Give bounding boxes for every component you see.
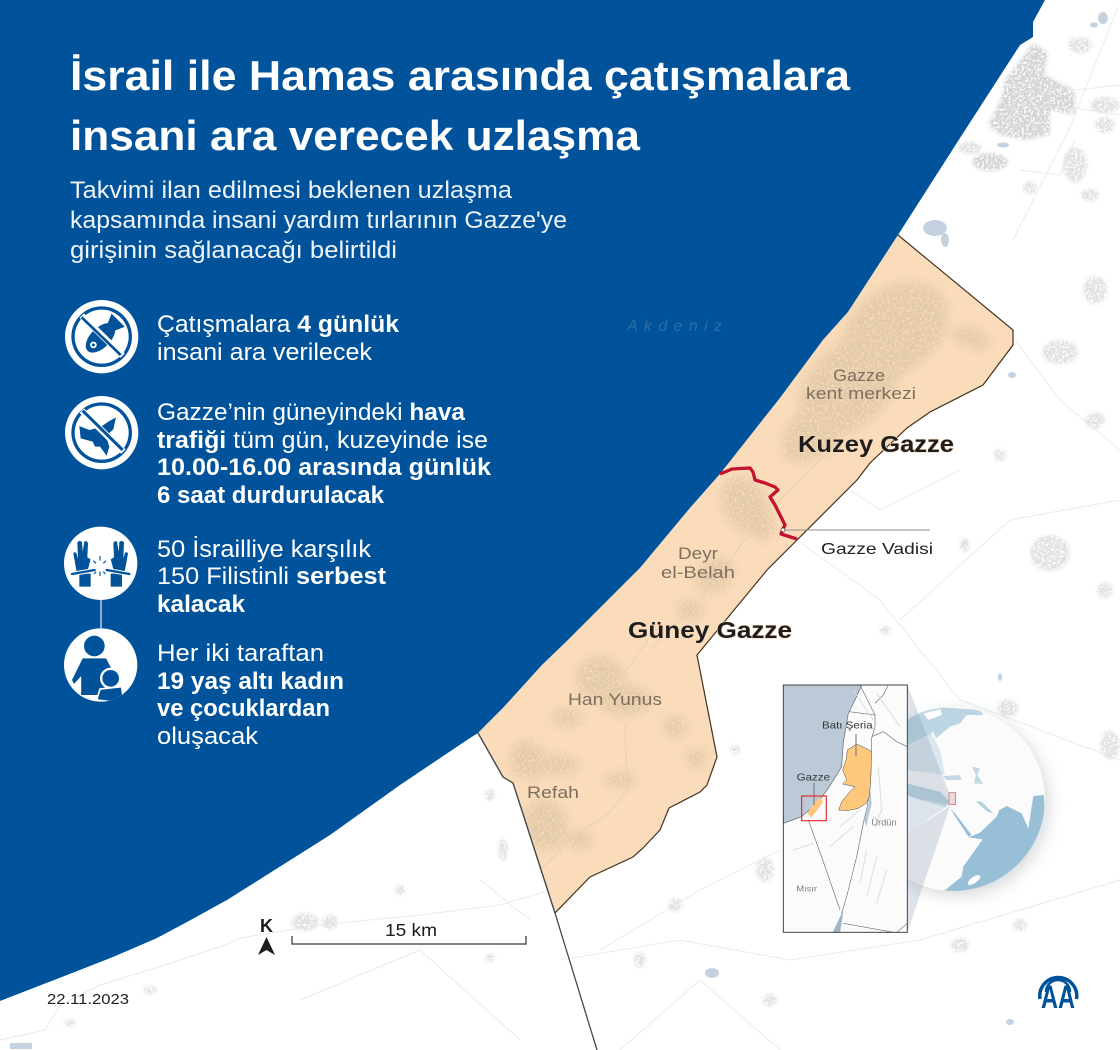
subtitle: kapsamında insani yardım tırlarının Gazze'ye	[70, 207, 567, 234]
subtitle	[70, 177, 567, 264]
locator: globe and inset map: Mısır	[796, 883, 817, 893]
text: women and children: oluşacak	[157, 723, 259, 750]
text: prisoner exchange: kalacak	[157, 591, 246, 618]
subtitle: Takvimi ilan edilmesi beklenen uzlaşma	[70, 177, 513, 204]
text: women and children	[157, 640, 344, 750]
north arrow: K	[260, 916, 273, 936]
inset map	[783, 685, 907, 932]
text: women and children: 19 yaş altı kadın	[157, 668, 344, 695]
label: Deyr el-Belah: Deyr	[678, 545, 719, 563]
text: prisoner exchange: 150 Filistinli serbest	[157, 563, 386, 590]
text: air traffic: 6 saat durdurulacak	[157, 482, 385, 509]
text: air traffic: Gazze’nin güneyindeki hava	[157, 399, 466, 426]
text: 4 günlük insani ara: insani ara verilecek	[157, 339, 373, 366]
icon: no bombing	[65, 300, 138, 373]
title: İsrail ile Hamas arasında çatışmalara	[70, 52, 851, 99]
label: Gazze kent merkezi: Gazze	[833, 367, 885, 385]
logo: AA: AA	[1041, 979, 1075, 1015]
text: prisoner exchange: 50 İsrailliye karşılık	[157, 536, 372, 563]
scale bar	[292, 920, 526, 944]
West Bank	[839, 744, 872, 811]
label: Deyr el-Belah: el-Belah	[661, 564, 735, 582]
icon: prisoners released	[64, 527, 137, 600]
locator: globe and inset map: Gazze	[797, 773, 830, 784]
beam from globe to inset	[907, 685, 949, 805]
red line: Gaza Valley dividing line	[720, 468, 797, 539]
locator: globe and inset map: Batı Şeria	[822, 720, 873, 731]
icon: women and children	[64, 628, 137, 703]
label: Han Yunus: Han Yunus	[568, 690, 662, 709]
label: Deyr el-Belah	[661, 545, 735, 582]
border line: Egypt	[478, 733, 597, 1050]
text: 4 günlük insani ara: Çatışmalara 4 günlük	[157, 311, 400, 338]
locator: globe and inset map	[783, 685, 1047, 932]
text: air traffic: trafiği tüm gün, kuzeyinde ise	[157, 427, 488, 454]
label: Kuzey Gazze: Kuzey Gazze	[798, 431, 954, 457]
Gaza shape	[807, 797, 823, 817]
text: prisoner exchange	[157, 536, 386, 618]
locator: globe and inset map: Ürdün	[871, 817, 897, 827]
callout: Gazze Vadisi	[781, 528, 933, 558]
text: 4 günlük insani ara	[157, 311, 400, 366]
text: air traffic: 10.00-16.00 arasında günlük	[157, 454, 492, 481]
connector line between icons	[100, 598, 102, 632]
text: women and children: ve çocuklardan	[157, 695, 330, 722]
label: Gazze kent merkezi	[806, 367, 916, 403]
subtitle: girişinin sağlanacağı belirtildi	[70, 237, 397, 264]
date: 22.11.2023	[47, 991, 129, 1008]
text: women and children: Her iki taraftan	[157, 640, 324, 667]
title	[70, 52, 851, 159]
globe	[908, 686, 1054, 930]
label: Refah: Refah	[527, 783, 579, 802]
text: air traffic	[157, 399, 492, 509]
scale bar: 15 km	[385, 920, 437, 940]
north arrow	[258, 916, 275, 955]
label: Akdeniz: Akdeniz	[626, 318, 722, 335]
title: insani ara verecek uzlaşma	[70, 112, 641, 159]
map: Gaza Strip territory	[478, 235, 1013, 913]
callout: Gazze Vadisi: Gazze Vadisi	[821, 541, 933, 558]
label: Güney Gazze: Güney Gazze	[628, 617, 792, 643]
icon: no air traffic	[65, 396, 138, 469]
label: Gazze kent merkezi: kent merkezi	[806, 385, 916, 403]
